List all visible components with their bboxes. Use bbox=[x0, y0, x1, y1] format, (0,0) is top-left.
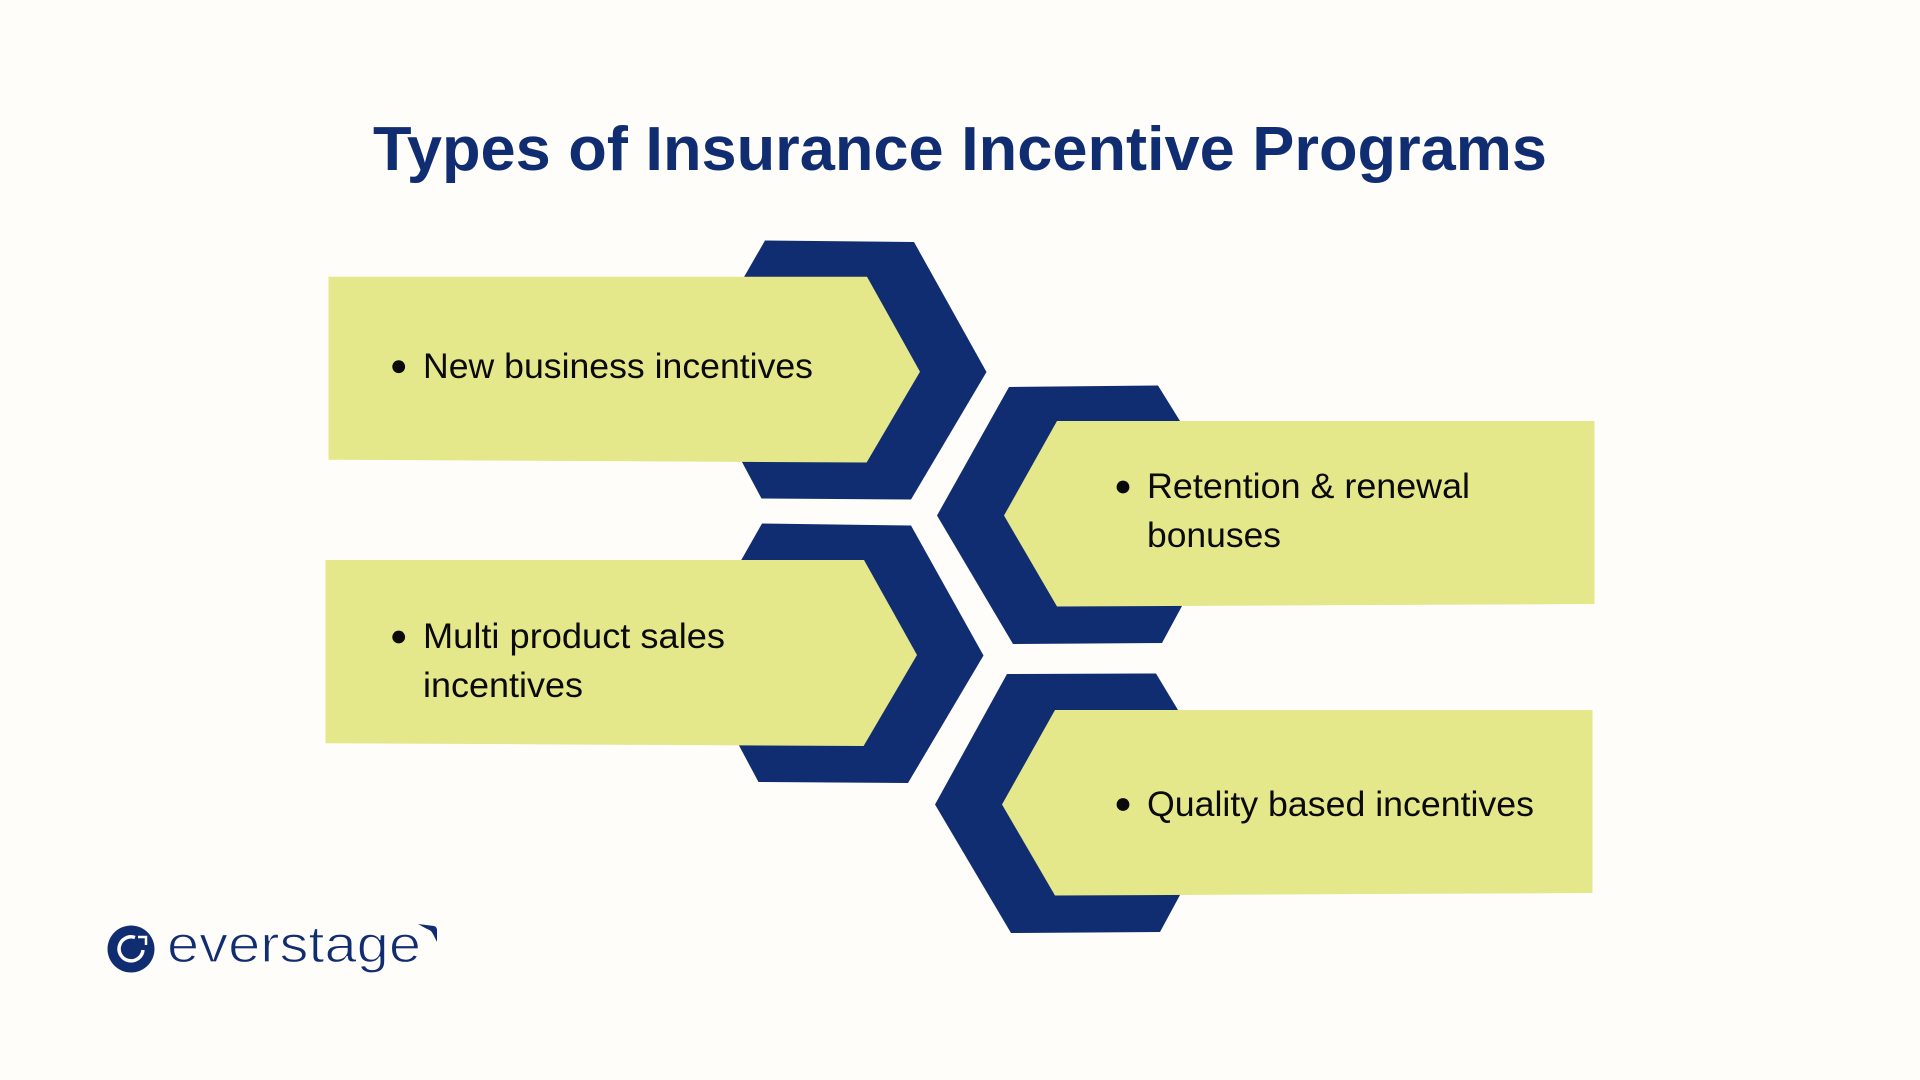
icon: logo circle bbox=[108, 926, 154, 972]
title: Types of Insurance Incentive Programs bbox=[373, 115, 1547, 184]
icon: navy chevron lower right bbox=[935, 674, 1180, 933]
bullet bbox=[392, 631, 405, 643]
bullet bbox=[1117, 798, 1129, 811]
yellow arrow panel lower left bbox=[326, 560, 917, 746]
panel: new business incentives bbox=[328, 240, 986, 500]
yellow arrow panel top left bbox=[328, 277, 920, 462]
panel: multi product sales incentives bbox=[326, 524, 984, 783]
icon: wordmark corner mark bbox=[418, 924, 437, 942]
label: new business incentives: New business incentives bbox=[423, 347, 813, 386]
label: retention and renewal bonuses: Retention & renewal bbox=[1147, 467, 1470, 506]
yellow arrow panel lower right bbox=[1002, 710, 1592, 896]
bullet bbox=[1117, 481, 1129, 493]
bullet bbox=[392, 360, 405, 373]
icon: navy chevron top left bbox=[742, 240, 986, 500]
icon: navy chevron lower left bbox=[739, 524, 984, 783]
label: multi product sales incentives: incentives bbox=[423, 666, 583, 705]
icon: navy chevron top right bbox=[937, 386, 1182, 644]
logo: everstage bbox=[108, 916, 437, 974]
label: multi product sales incentives: Multi product sales bbox=[423, 617, 725, 656]
yellow arrow panel top right bbox=[1004, 421, 1594, 606]
panel: retention and renewal bonuses bbox=[937, 386, 1594, 644]
panel: quality based incentives bbox=[935, 674, 1592, 933]
label: quality based incentives: Quality based incentives bbox=[1147, 785, 1534, 824]
label: retention and renewal bonuses: bonuses bbox=[1147, 516, 1281, 555]
wordmark: everstage bbox=[167, 916, 421, 974]
